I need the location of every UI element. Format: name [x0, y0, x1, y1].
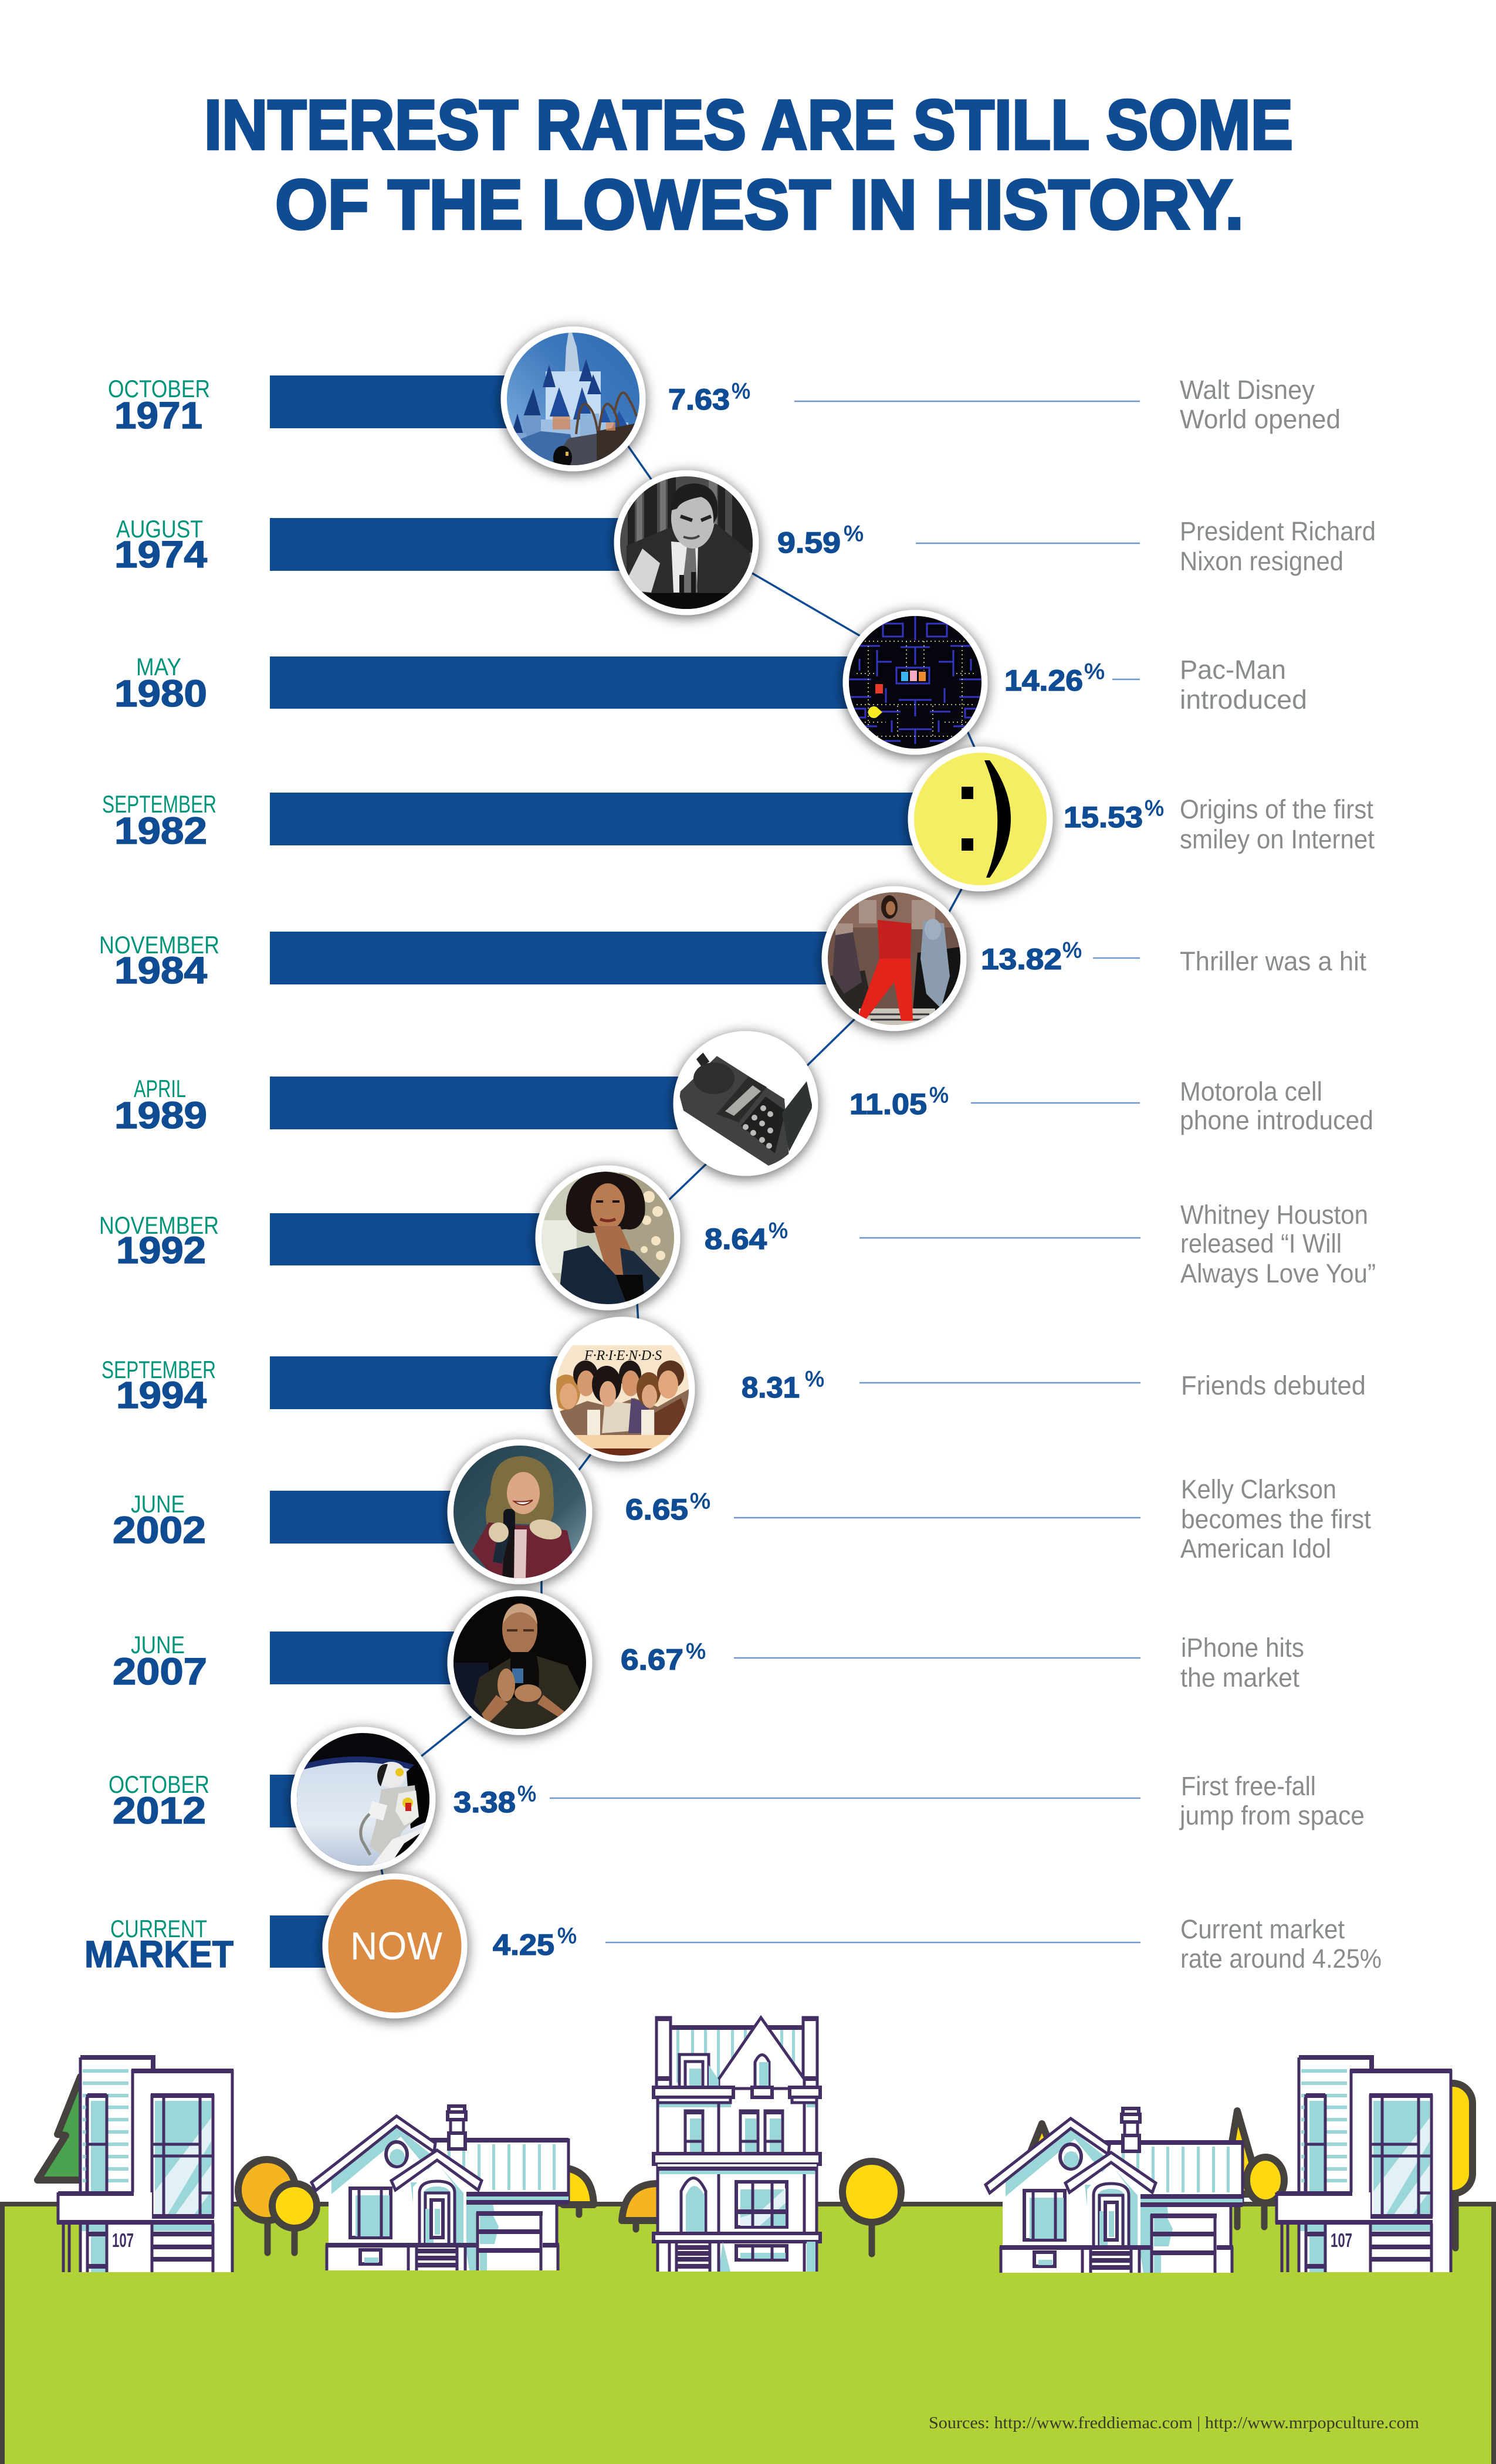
rate value: 6.67	[621, 1643, 683, 1676]
rate value: 7.63	[668, 383, 730, 416]
rate value: 9.59	[777, 526, 841, 559]
event description: phone introduced	[1180, 1105, 1373, 1135]
event description: Pac-Man	[1180, 655, 1286, 685]
row: September 1982	[102, 746, 1375, 892]
event description	[1180, 1077, 1373, 1135]
event description: Friends debuted	[1181, 1370, 1366, 1400]
date label: NOVEMBER	[99, 1211, 219, 1239]
row: August 1974	[114, 471, 1376, 615]
date label	[102, 790, 216, 852]
event description: First free-fall	[1181, 1771, 1316, 1801]
event description	[1180, 655, 1307, 715]
row: October 2012	[109, 1727, 1365, 2047]
rate bar	[270, 1077, 746, 1129]
rate value: %	[844, 522, 864, 546]
event description: Motorola cell	[1180, 1077, 1322, 1106]
rate bar	[270, 375, 573, 428]
rate value: 6.65	[625, 1493, 688, 1526]
event description: Origins of the first	[1180, 794, 1373, 824]
rate value	[742, 1367, 824, 1404]
event description: released “I Will	[1180, 1228, 1342, 1258]
tree: yellow	[272, 2184, 317, 2253]
event description: smiley on Internet	[1180, 824, 1375, 854]
date label	[84, 1915, 233, 1975]
house: cottage left	[312, 2105, 568, 2270]
event description: becomes the first	[1181, 1504, 1371, 1534]
tree: yellow small right	[1247, 2157, 1284, 2227]
tree: green pine	[38, 2077, 82, 2180]
event description: Current market	[1180, 1914, 1345, 1944]
event description: rate around 4.25%	[1180, 1944, 1382, 1974]
event description: Whitney Houston	[1180, 1200, 1368, 1230]
row: June 2002	[113, 1440, 1371, 1584]
date label: NOVEMBER	[99, 931, 219, 959]
photo: Friends cast	[550, 1316, 695, 1462]
event description	[1180, 1914, 1382, 1974]
date label	[114, 515, 207, 576]
photo: Kelly Clarkson	[447, 1440, 593, 1584]
rate value	[849, 1083, 949, 1121]
rate value: %	[686, 1639, 706, 1664]
event description	[1180, 1474, 1371, 1563]
photo: Whitney Houston	[535, 1165, 681, 1311]
rate value: %	[557, 1924, 577, 1948]
rate bar	[270, 932, 894, 984]
rate value	[1004, 659, 1105, 697]
rate bar	[270, 1632, 520, 1684]
rate value: 8.64	[705, 1223, 767, 1255]
photo: Motorola phone	[673, 1031, 818, 1176]
date label: 2012	[113, 1789, 206, 1832]
rate value: %	[690, 1489, 710, 1514]
date label: JUNE	[131, 1631, 185, 1659]
badge: NOW: NOW	[350, 1924, 443, 1968]
tree: orange dome	[622, 2184, 660, 2229]
connector line between circles	[381, 439, 977, 1877]
event description: Kelly Clarkson	[1181, 1474, 1336, 1504]
event description: Thriller was a hit	[1180, 946, 1366, 976]
date label: 1984	[114, 949, 207, 991]
rate value: %	[929, 1083, 949, 1108]
rate value	[1064, 796, 1164, 834]
row: September 1994	[101, 1316, 1366, 1462]
tree: triangle right	[1223, 2111, 1261, 2227]
photo: Richard Nixon	[614, 471, 759, 615]
house: victorian centre	[654, 2018, 820, 2272]
title: OF THE LOWEST IN HISTORY.	[275, 165, 1244, 244]
photo: Friends cast: F·R·I·E·N·D·S	[584, 1348, 662, 1363]
rate value: 11.05	[849, 1088, 927, 1121]
rate value	[453, 1782, 536, 1819]
photo: free-fall jump from space	[187, 1727, 527, 2047]
date label: CURRENT	[110, 1915, 207, 1942]
event description: jump from space	[1179, 1800, 1365, 1830]
event description	[1180, 1633, 1304, 1693]
date label: 1982	[114, 810, 207, 852]
event description: iPhone hits	[1181, 1633, 1304, 1663]
trees behind houses	[38, 2077, 1473, 2254]
row: October 1971	[108, 326, 1341, 472]
event description: Nixon resigned	[1180, 546, 1343, 576]
event description	[1180, 1200, 1376, 1288]
rate value: %	[732, 379, 750, 404]
event description: Walt Disney	[1180, 375, 1315, 405]
date label: 1989	[114, 1094, 207, 1136]
event description: President Richard	[1180, 516, 1376, 546]
date label	[114, 653, 207, 715]
rate bar	[270, 518, 686, 571]
rate bar	[270, 793, 980, 845]
date label	[99, 1211, 219, 1271]
house: cottage right	[986, 2107, 1243, 2273]
rate bar	[270, 1356, 622, 1409]
title	[204, 86, 1293, 244]
date label: JUNE	[131, 1490, 185, 1518]
date label: 1992	[116, 1229, 206, 1271]
tree: yellow dome behind cottage	[563, 2168, 594, 2215]
date label: 2002	[113, 1509, 206, 1551]
rate value: %	[805, 1367, 824, 1392]
row: June 2007	[113, 1590, 1304, 1735]
event description: American Idol	[1180, 1534, 1331, 1563]
event description: the market	[1180, 1663, 1299, 1693]
rate value: 3.38	[453, 1786, 516, 1819]
date label	[108, 375, 210, 436]
rate value: 13.82	[981, 943, 1062, 976]
date label	[99, 931, 219, 991]
event description: introduced	[1180, 685, 1307, 715]
rate value: %	[1062, 938, 1082, 963]
date label: 1980	[114, 672, 207, 715]
rate value: %	[769, 1219, 788, 1243]
event description	[1179, 1771, 1365, 1830]
ground	[0, 2202, 1496, 2464]
row: April 1989	[114, 1031, 1373, 1176]
date label: SEPTEMBER	[102, 790, 216, 818]
rate value	[777, 522, 864, 559]
rate bar	[270, 1775, 363, 1827]
rate bar	[270, 1915, 395, 1968]
tree: yellow centre	[842, 2161, 901, 2254]
row: May 1980	[114, 610, 1307, 754]
date label: 1974	[114, 533, 207, 576]
photo: Steve Jobs with iPhone	[447, 1590, 593, 1735]
title: INTEREST RATES ARE STILL SOME	[204, 86, 1293, 164]
rate value	[621, 1639, 706, 1676]
house: modern left	[57, 2057, 233, 2272]
event description	[1180, 516, 1376, 576]
rate value: %	[517, 1782, 536, 1806]
rate bar	[270, 1491, 520, 1544]
date label	[113, 1490, 206, 1551]
date label	[114, 1075, 207, 1136]
photo: Cinderella castle	[501, 326, 645, 472]
rate value	[705, 1219, 788, 1255]
rate value	[625, 1489, 710, 1526]
event description	[1180, 794, 1375, 854]
rate value: 15.53	[1064, 801, 1143, 834]
date label: APRIL	[134, 1075, 186, 1102]
date label: MAY	[136, 653, 181, 681]
rate value: 4.25	[493, 1928, 554, 1961]
row: November 1984	[99, 886, 1366, 1031]
tree: small triangle behind right cottage	[1028, 2124, 1056, 2159]
rate value: 8.31	[742, 1371, 800, 1404]
rate value	[981, 938, 1082, 976]
rate value: 14.26	[1004, 664, 1083, 697]
date label	[101, 1356, 216, 1416]
row: November 1992	[99, 1165, 1376, 1311]
rate bar	[270, 1213, 608, 1265]
icon: smiley	[908, 746, 1052, 892]
rate bar	[270, 656, 915, 709]
event description: Always Love You”	[1180, 1258, 1376, 1288]
date label: OCTOBER	[109, 1771, 209, 1798]
rate value	[668, 379, 750, 416]
date label	[109, 1771, 209, 1832]
date label: OCTOBER	[108, 375, 210, 402]
row: current market	[84, 1874, 1382, 2018]
event description: World opened	[1180, 404, 1341, 434]
tree: orange	[238, 2160, 296, 2253]
rate value: %	[1145, 796, 1164, 821]
date label: SEPTEMBER	[101, 1356, 216, 1383]
date label: 1994	[116, 1374, 207, 1416]
badge: NOW	[323, 1874, 467, 2018]
image: Pac-Man maze	[842, 610, 988, 754]
date label: MARKET	[84, 1933, 233, 1975]
photo: Thriller	[821, 886, 967, 1031]
date label: 1971	[114, 394, 202, 436]
date label: 2007	[113, 1650, 207, 1693]
rate value	[493, 1924, 577, 1961]
rate value: %	[1084, 659, 1105, 684]
sources: Sources: http://www.freddiemac.com | http://www.mrpopculture.com	[929, 2414, 1419, 2432]
event description	[1180, 375, 1341, 434]
house: modern right	[1275, 2057, 1452, 2272]
date label	[113, 1631, 207, 1693]
date label: AUGUST	[116, 515, 203, 543]
tree: tall yellow right	[1431, 2083, 1473, 2248]
